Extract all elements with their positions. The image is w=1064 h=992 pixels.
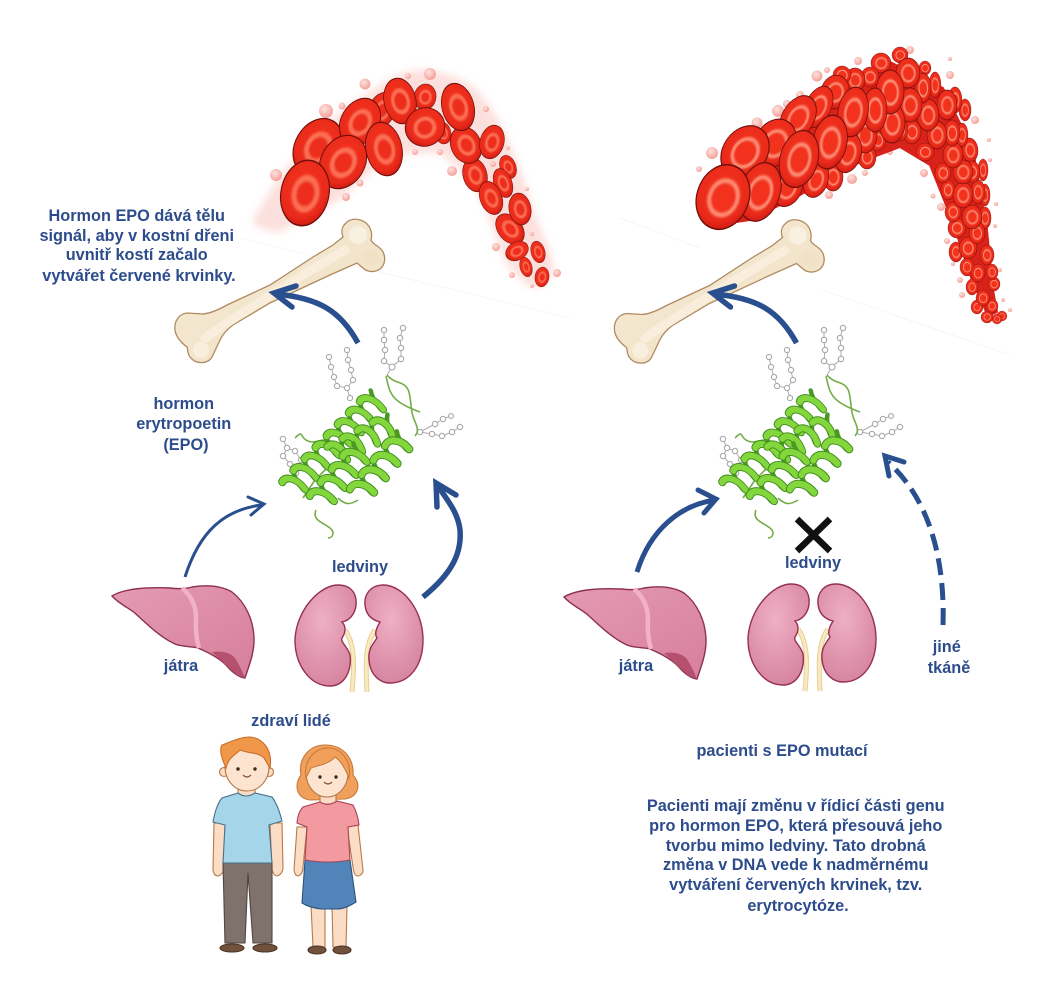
text: EPO signal explanation: Hormon EPO dává tělu bbox=[49, 207, 225, 225]
label: hormone erythropoietin: (EPO) bbox=[163, 436, 209, 454]
arrow: EPO to bone left bbox=[274, 286, 358, 343]
blood cells: excess amount bbox=[687, 46, 1012, 324]
text: patient explanation: erytrocytóze. bbox=[747, 897, 849, 915]
icon: liver left bbox=[112, 586, 254, 678]
text: patient explanation: Pacienti mají změnu v řídicí části genu bbox=[647, 797, 945, 815]
text: patient explanation: pro hormon EPO, která přesouvá jeho bbox=[649, 817, 942, 835]
label: other tissues: jiné bbox=[932, 638, 961, 656]
boy bbox=[213, 737, 283, 952]
label: other tissues: tkáně bbox=[928, 659, 970, 677]
arrow: EPO to bone right bbox=[712, 286, 796, 343]
arrow: kidneys to EPO bbox=[423, 483, 460, 597]
arrow: liver to EPO right bbox=[637, 490, 716, 572]
icon: liver right bbox=[564, 587, 706, 679]
text: EPO signal explanation: uvnitř kostí začalo bbox=[66, 246, 208, 264]
icon: EPO protein left bbox=[280, 325, 463, 538]
icon: blocked kidney production cross bbox=[797, 519, 830, 551]
panel: patients with EPO mutation bbox=[564, 46, 1012, 691]
girl bbox=[294, 745, 363, 954]
icon: EPO protein right bbox=[720, 325, 903, 538]
arrow: liver to EPO thin bbox=[185, 497, 264, 577]
label: kidneys left: ledviny bbox=[332, 558, 388, 576]
icon: kidneys right bbox=[748, 584, 876, 691]
text: patient explanation: vytváření červených krvinek, tzv. bbox=[669, 876, 922, 894]
icon: bone left bbox=[175, 219, 385, 363]
icon: bone right bbox=[614, 220, 824, 363]
label: liver right: játra bbox=[618, 657, 654, 675]
label: liver left: játra bbox=[163, 657, 199, 675]
panel: healthy people bbox=[112, 68, 561, 954]
arrow: other tissues dashed bbox=[885, 456, 943, 625]
label: patients with EPO mutation: pacienti s EPO mutací bbox=[696, 742, 868, 760]
label: hormone erythropoietin: hormon bbox=[153, 395, 214, 413]
text: patient explanation: tvorbu mimo ledviny. Tato drobná bbox=[666, 837, 927, 855]
label: healthy people: zdraví lidé bbox=[251, 712, 331, 730]
icon: kidneys left bbox=[295, 585, 423, 692]
text: patient explanation: změna v DNA vede k nadměrnému bbox=[663, 856, 928, 874]
blood cells: normal amount bbox=[252, 68, 561, 288]
text: EPO signal explanation: signál, aby v kostní dřeni bbox=[39, 227, 234, 245]
label: hormone erythropoietin: erytropoetin bbox=[136, 415, 231, 433]
label: kidneys right: ledviny bbox=[785, 554, 841, 572]
icon: healthy people bbox=[213, 737, 363, 954]
text: EPO signal explanation: vytvářet červené krvinky. bbox=[42, 267, 236, 285]
